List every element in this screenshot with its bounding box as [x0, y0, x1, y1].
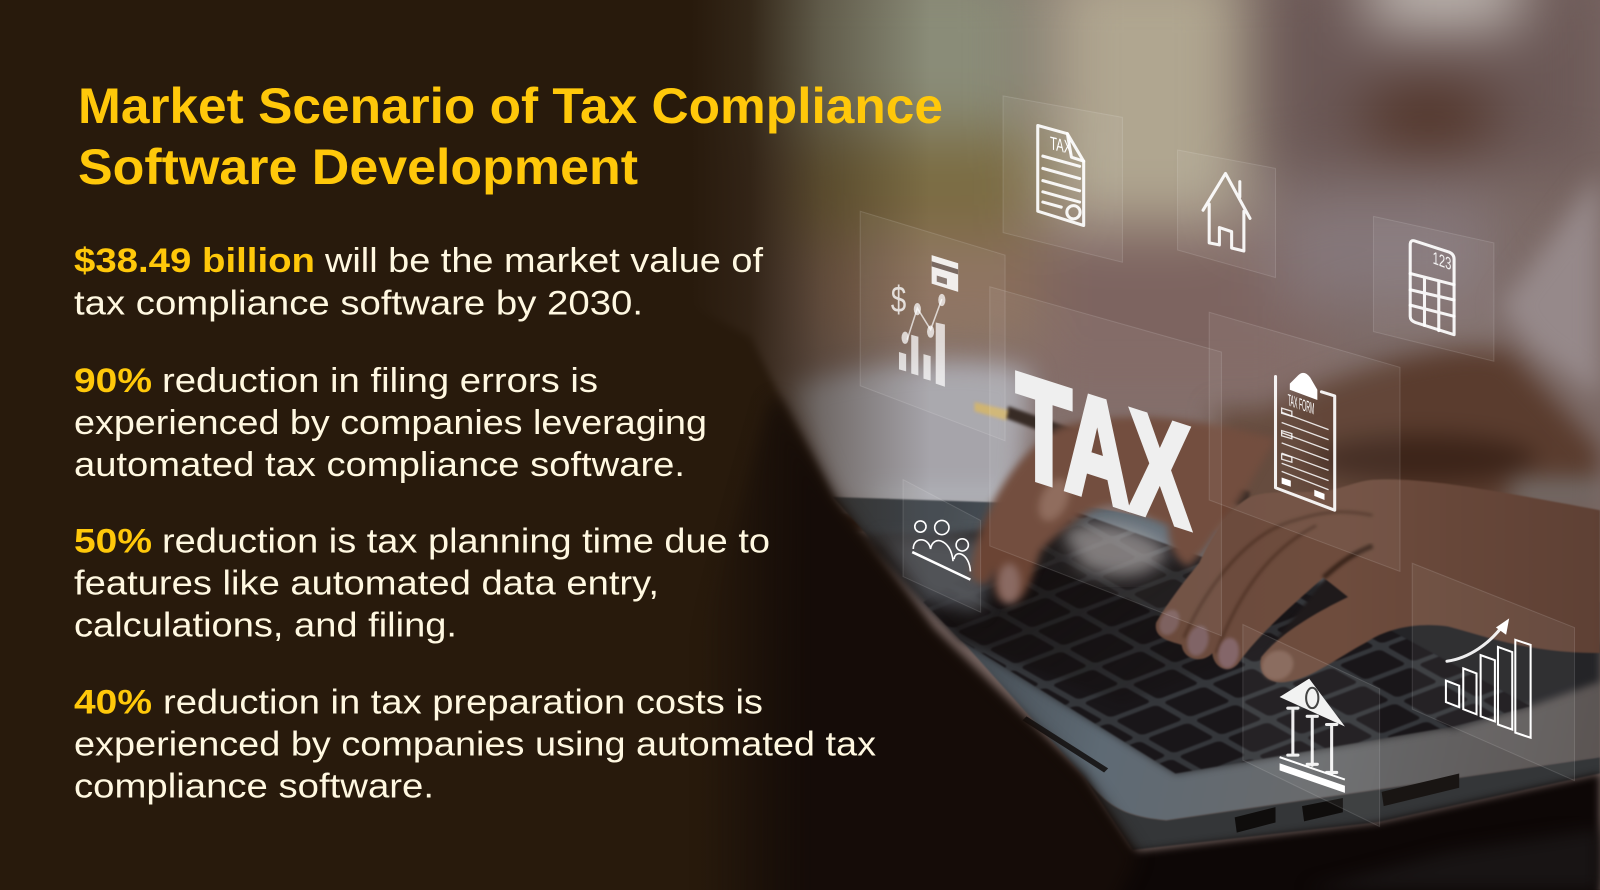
icon panel: big TAX: TAX — [1016, 344, 1190, 559]
stat: preparation costs: experienced by companies using automated tax — [74, 726, 876, 764]
stat: preparation costs: compliance software. — [74, 768, 434, 806]
stat: planning time: calculations, and filing. — [74, 606, 457, 644]
stat: market value: will be the market value of — [324, 242, 763, 280]
holographic icons layer — [860, 96, 1574, 827]
stat: filing errors: reduction in filing errors is — [162, 362, 598, 400]
icon panel: house — [1178, 150, 1276, 278]
icon panel: tax document: TAX — [1050, 132, 1072, 158]
left hand — [971, 417, 1276, 604]
title: Software Development — [78, 139, 638, 195]
stat: preparation costs: reduction in tax preparation costs is — [163, 684, 763, 722]
stat: preparation costs: 40% — [74, 684, 152, 722]
laptop lid and floor — [653, 286, 1138, 890]
stat: market value — [74, 242, 763, 322]
icon panel: tax document — [1003, 96, 1122, 262]
stat: planning time: 50% — [74, 522, 152, 560]
pencil — [974, 402, 1250, 508]
icon panel: bank building — [1243, 624, 1380, 827]
left dark overlay — [690, 0, 930, 890]
stat: filing errors: 90% — [74, 362, 152, 400]
icon panel: people — [903, 480, 981, 612]
stat: filing errors — [74, 362, 707, 484]
stat: preparation costs — [74, 684, 876, 806]
stat: filing errors: experienced by companies leveraging — [74, 404, 707, 442]
stat: planning time — [74, 522, 770, 644]
laptop front face — [1084, 757, 1600, 850]
laptop body — [833, 497, 1600, 850]
stat: market value: tax compliance software by 2030. — [74, 284, 643, 322]
icon panel: finance chart: $ — [891, 279, 906, 320]
icon panel: calculator: 123 — [1433, 248, 1451, 275]
icon panel: tax form clipboard: TAX FORM — [1288, 390, 1314, 418]
stat: market value: $38.49 billion — [74, 242, 315, 280]
icon panel: calculator — [1373, 216, 1494, 361]
icon panel: big TAX — [990, 287, 1221, 636]
right hand — [1155, 479, 1600, 686]
icon panel: tax form clipboard — [1209, 312, 1400, 571]
background photo: hands typing on a laptop — [653, 0, 1600, 890]
stat: filing errors: automated tax compliance software. — [74, 446, 685, 484]
icon panel: finance chart — [860, 211, 1005, 441]
icon panel: growth bars — [1412, 563, 1574, 781]
title: Market Scenario of Tax Compliance — [78, 78, 943, 134]
laptop lid shadow — [700, 398, 1138, 890]
stat: planning time: features like automated data entry, — [74, 564, 659, 602]
title — [78, 78, 943, 195]
stat: planning time: reduction is tax planning time due to — [162, 522, 770, 560]
